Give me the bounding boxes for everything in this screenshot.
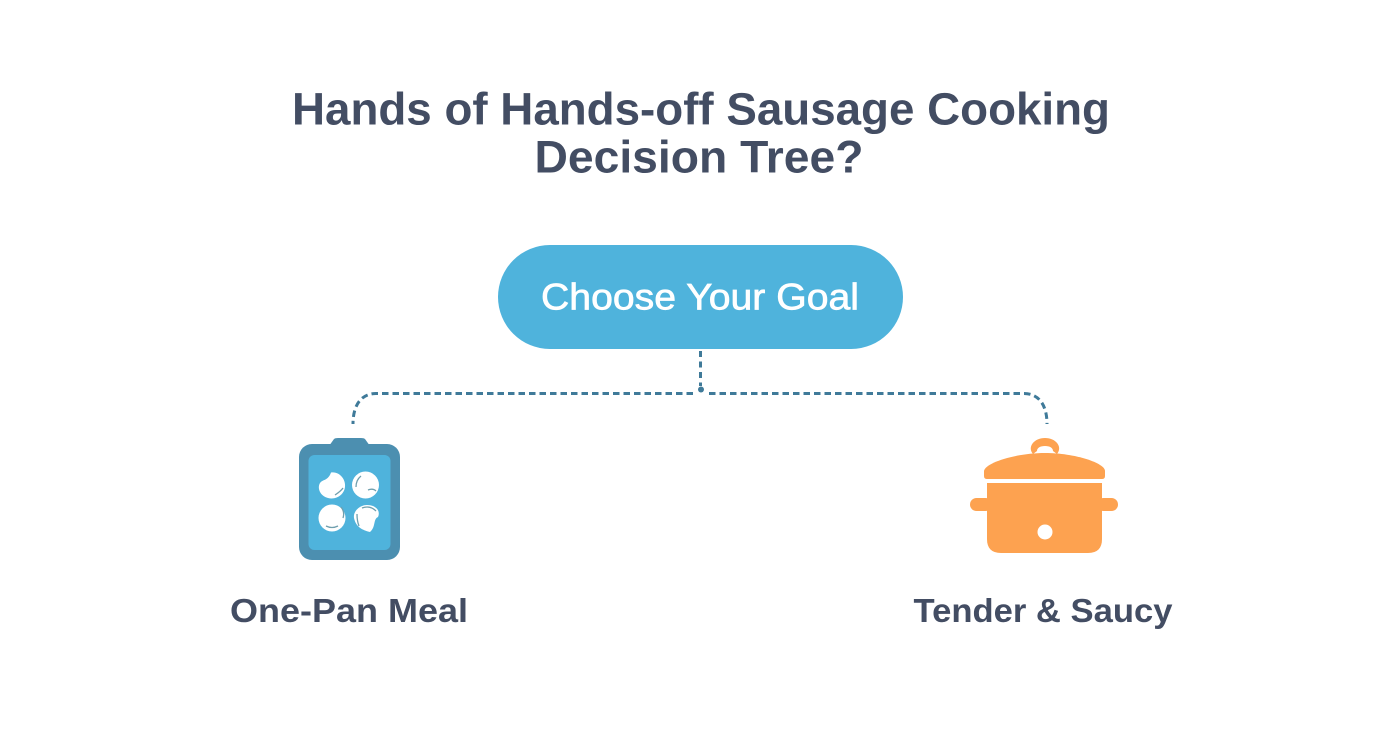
icon: slow cooker [970,438,1118,553]
start node: Choose Your Goal: Choose Your Goal [541,276,859,318]
title [292,84,1110,182]
dashed connector [353,351,1047,424]
sausage pieces [318,472,379,532]
lid [984,453,1105,479]
start node: Choose Your Goal [498,245,903,349]
handles [970,498,992,511]
title: Decision Tree? [534,132,864,182]
indicator dial [1038,524,1052,540]
lid knob [1031,438,1059,454]
label: Tender & Saucy: Tender & Saucy [914,592,1173,629]
title: Hands of Hands-off Sausage Cooking [292,84,1110,134]
icon: sheet pan with sausages [299,438,400,560]
pot body [987,483,1102,553]
label: One-Pan Meal: One-Pan Meal [230,592,468,629]
sausage score marks [326,476,376,528]
